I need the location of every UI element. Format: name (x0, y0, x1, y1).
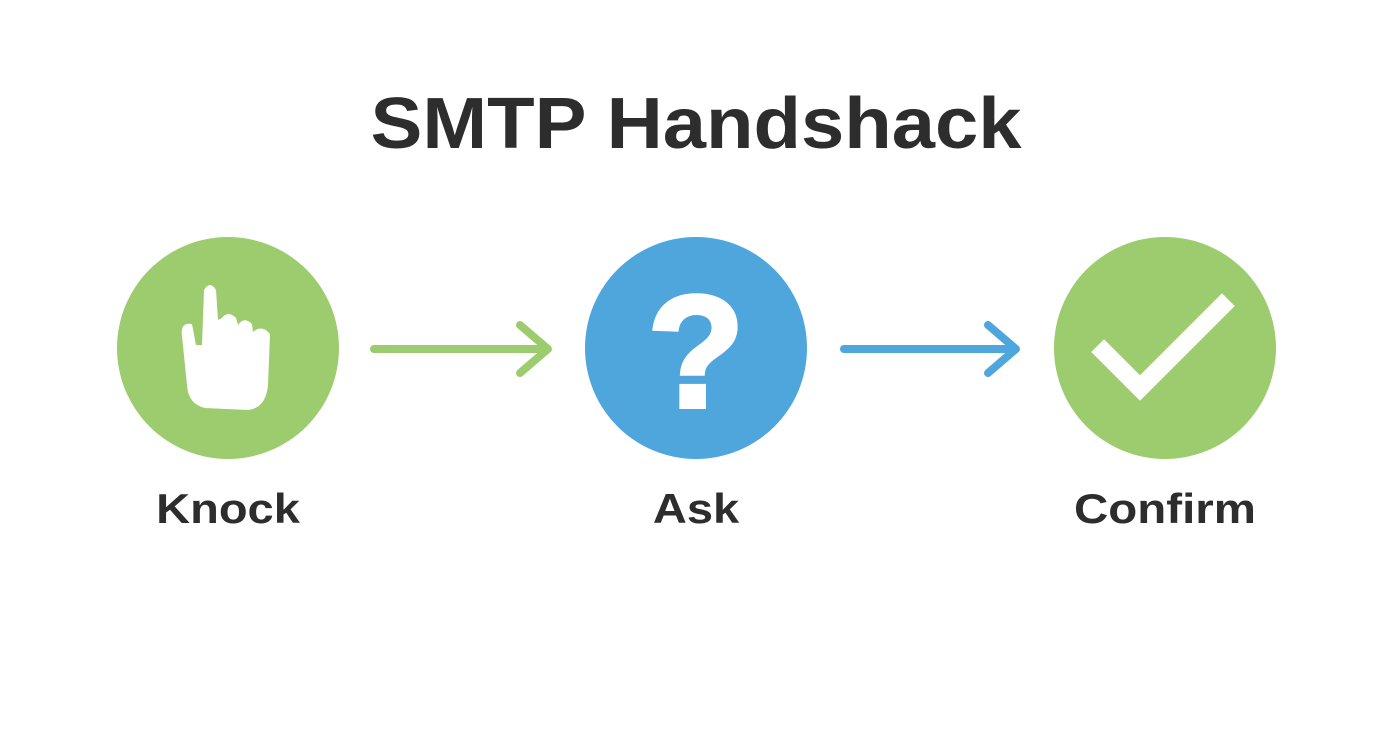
icon: check (1054, 237, 1276, 459)
arrow: green (374, 325, 548, 373)
label: ask: Ask (653, 485, 739, 532)
icon: knock hand (117, 237, 339, 459)
title: SMTP Handshack (370, 84, 1022, 164)
icon: question: ? (647, 262, 745, 441)
label: confirm: Confirm (1074, 485, 1256, 532)
icon: question (585, 237, 807, 459)
label: knock: Knock (156, 485, 300, 532)
arrow: blue (844, 325, 1016, 373)
